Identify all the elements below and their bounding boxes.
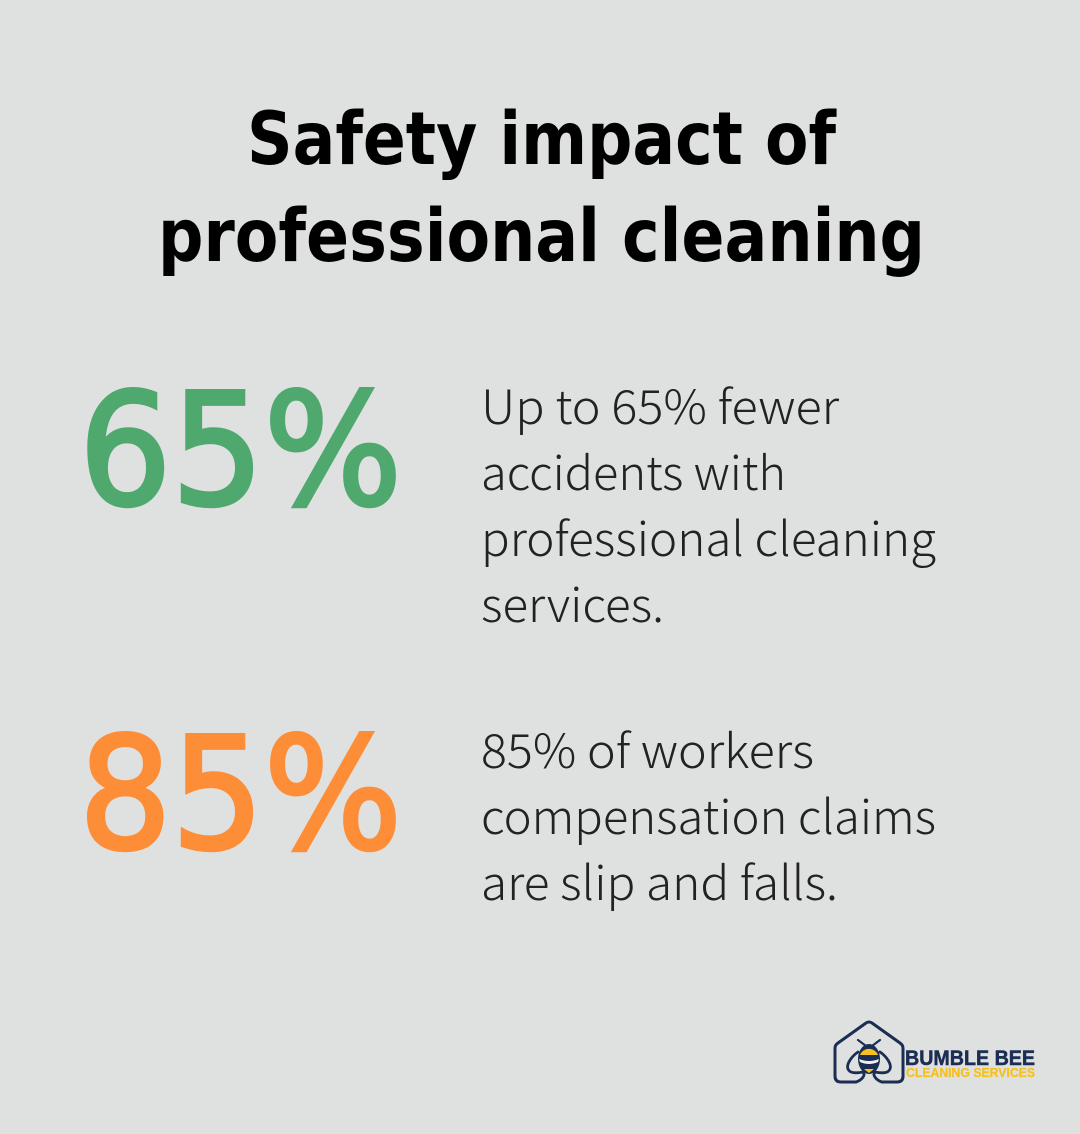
text block: 85% description: 85% of workers [481,713,814,782]
stat: 65%: 65% [79,360,402,541]
text block: 85% description: are slip and falls. [481,845,838,914]
title: Safety impact of [247,97,837,182]
title: professional cleaning [158,194,925,279]
text block: 65% description: accidents with [481,435,786,504]
logo: Bumble Bee Cleaning Services [835,1022,1035,1082]
icon: house with bee [835,1022,903,1082]
text block: 65% description: services. [481,567,664,636]
wordmark: BUMBLE BEE [905,1047,1035,1070]
text block: 65% description: professional cleaning [481,501,936,570]
stat: 85%: 85% [79,704,402,885]
text block: 85% description: compensation claims [481,779,936,848]
tagline: CLEANING SERVICES [906,1065,1035,1080]
text block: 85% description [481,713,936,914]
text block: 65% description [481,369,936,636]
text block: 65% description: Up to 65% fewer [481,369,839,438]
title [158,97,925,279]
